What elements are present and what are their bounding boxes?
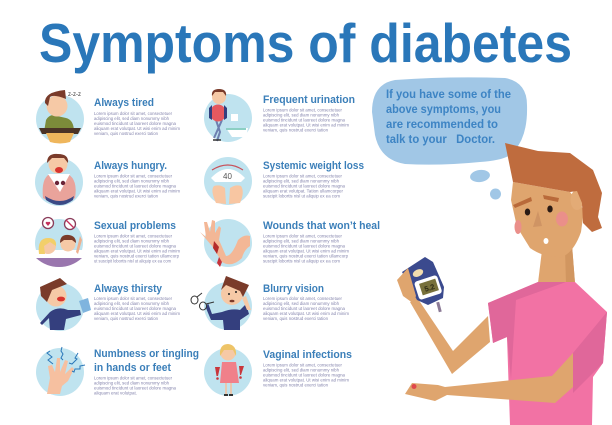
- panel: always hungry: [35, 154, 180, 206]
- heading: Vaginal infections: [263, 349, 352, 361]
- mouth: [544, 238, 548, 244]
- shirt: [488, 282, 607, 425]
- body text: aliquam erat volutpat. Ut wisi enim ad minim: [263, 378, 349, 382]
- body text: Lorem ipsum dolor sit amet, consectetuer: [263, 362, 342, 368]
- icon: man and toilet: [204, 89, 252, 142]
- body text: euismod tincidunt ut laoreet dolore magna: [94, 386, 176, 390]
- heading: Always thirsty: [94, 283, 163, 295]
- body text: [94, 234, 180, 264]
- body text: [263, 174, 345, 198]
- body text: euismod tincidunt ut laoreet dolore magna: [263, 372, 345, 378]
- body text: aliquam erat volutpat. Ut wisi enim ad minim: [94, 248, 180, 254]
- body text: veniam, quis nostrud exerci tation: [263, 316, 328, 321]
- heading: Always tired: [94, 97, 154, 109]
- panel: always tired: [36, 90, 180, 144]
- heading: Sexual problems: [94, 220, 176, 232]
- body text: adipiscing elit, sed diam nonummy nibh: [94, 238, 169, 244]
- icon: tired man: [36, 90, 84, 144]
- eyebrows: [513, 195, 559, 208]
- icon: scale: [204, 157, 252, 205]
- body text: aliquam erat volutpat. Ut wisi enim ad minim: [263, 311, 349, 316]
- body text: [263, 234, 349, 264]
- body text: Lorem ipsum dolor sit amet, consectetuer: [263, 174, 342, 178]
- body text: euismod tincidunt ut laoreet dolore magna: [94, 306, 176, 311]
- icon: hungry man: [35, 154, 83, 206]
- icon: tingling hand: [36, 347, 85, 396]
- body text: adipiscing elit, sed diam nonummy nibh: [263, 178, 339, 184]
- icon: wounded hand: [200, 219, 252, 267]
- icon: tired man: z-z-z: [68, 92, 81, 98]
- body text: adipiscing elit, sed diam nonummy nibh: [263, 368, 339, 372]
- body text: [94, 174, 180, 198]
- title: Symptoms of diabetes: [39, 12, 572, 74]
- body text: euismod tincidunt ut laoreet dolore magna: [263, 184, 345, 188]
- panel: sexual problems: [35, 218, 180, 267]
- neck: [538, 245, 575, 283]
- body text: Lorem ipsum dolor sit amet, consectetuer: [263, 108, 342, 112]
- body text: aliquam erat volutpat. Ut wisi enim ad minim: [94, 311, 180, 316]
- body text: veniam, quis nostrud exerci tation: [94, 131, 158, 136]
- heading: Frequent urination: [263, 94, 355, 106]
- body text: Lorem ipsum dolor sit amet, consectetuer: [94, 376, 172, 380]
- nose: [533, 211, 542, 227]
- raised arm: [410, 296, 490, 374]
- callout text: If you have some of the: [386, 87, 511, 101]
- body text: aliquam erat volutpat. Ut wisi enim ad minim: [263, 122, 349, 128]
- glucose meter: 5.2: [423, 282, 436, 294]
- heading: Blurry vision: [263, 283, 324, 295]
- icon: thirsty man: [36, 278, 91, 331]
- heading line 2: in hands or feet: [94, 362, 171, 374]
- body text: euismod tincidunt ut laoreet dolore magna: [263, 118, 345, 122]
- body text: suscipit lobortis nisl ut aliquip ex ea com: [263, 258, 340, 264]
- heading: Numbness or tingling: [94, 348, 199, 360]
- body text: veniam, quis nostrud exerci tation: [263, 128, 328, 132]
- heading: Always hungry.: [94, 160, 167, 172]
- body text: veniam, quis nostrud exerci tation: [263, 382, 328, 388]
- body text: [94, 296, 180, 321]
- callout: thought bubble: [372, 77, 527, 200]
- body text: veniam, quis nostrud exerci tation ullamcorp: [94, 254, 179, 258]
- lower arm: [405, 353, 573, 403]
- body text: veniam, quis nostrud exerci tation ullamcorp: [263, 254, 348, 258]
- icon: scale: 40: [223, 172, 232, 181]
- body text: [263, 296, 349, 321]
- body text: adipiscing elit, sed diam nonummy nibh: [94, 380, 169, 386]
- body text: euismod tincidunt ut laoreet dolore magna: [263, 244, 345, 248]
- body text: [94, 376, 176, 396]
- body text: aliquam erat volutpat. Ut wisi enim ad minim: [263, 248, 349, 254]
- body text: aliquam erat volutpat. Ut wisi enim ad minim: [94, 126, 180, 131]
- body text: euismod tincidunt ut laoreet dolore magna: [94, 121, 176, 126]
- panel: always thirsty: [36, 278, 180, 331]
- body text: [263, 362, 349, 388]
- callout text: above symptoms, you: [386, 102, 501, 116]
- body text: [94, 111, 180, 136]
- callout text: [386, 87, 511, 146]
- body text: suscipit lobortis nisl ut aliquip ex ea com: [263, 194, 340, 198]
- head: [511, 182, 584, 257]
- body text: adipiscing elit, sed diam nonummy nibh: [94, 116, 169, 121]
- cheeks: [556, 212, 568, 226]
- body text: adipiscing elit, sed diam nonummy nibh: [263, 238, 339, 244]
- body text: veniam, quis nostrud exerci tation: [94, 194, 158, 198]
- body text: Lorem ipsum dolor sit amet, consectetuer: [94, 234, 172, 238]
- body text: adipiscing elit, sed diam nonummy nibh: [263, 112, 339, 118]
- icon: couple: [35, 218, 83, 267]
- icon: girl: [204, 344, 252, 396]
- heading: Systemic weight loss: [263, 160, 364, 172]
- body text: ut suscipit lobortis nisl ut aliquip ex ea com: [94, 258, 171, 264]
- panel: numbness: [36, 347, 199, 396]
- body text: Lorem ipsum dolor sit amet, consectetuer: [94, 296, 172, 301]
- glucose meter: [397, 257, 444, 312]
- body text: euismod tincidunt ut laoreet dolore magna: [94, 244, 176, 248]
- icon: glasses: [191, 293, 214, 310]
- panel: frequent urination: [204, 89, 355, 142]
- eyes: [525, 208, 530, 216]
- body text: [263, 108, 349, 132]
- body text: veniam, quis nostrud exerci tation: [94, 316, 158, 321]
- hair: [505, 143, 602, 232]
- body text: adipiscing elit, sed diam nonummy nibh: [94, 301, 169, 306]
- heading: Wounds that won’t heal: [263, 220, 380, 232]
- body text: aliquam erat volutpat. Tation ullamcorper: [263, 188, 343, 194]
- body text: adipiscing elit, sed diam nonummy nibh: [94, 178, 169, 184]
- panel: vaginal infections: [204, 344, 352, 396]
- callout text: talk to your Doctor.: [386, 132, 495, 146]
- icon: man with glasses: [191, 276, 252, 330]
- panel: blurry vision: [191, 276, 349, 330]
- panel: wounds: [200, 219, 380, 267]
- panel: systemic weight loss: [204, 157, 364, 205]
- body text: euismod tincidunt ut laoreet dolore magna: [263, 306, 345, 311]
- blood drop: [412, 384, 416, 389]
- body text: aliquam erat volutpat.: [94, 390, 137, 396]
- ear: [570, 190, 584, 210]
- body text: euismod tincidunt ut laoreet dolore magna: [94, 184, 176, 188]
- body text: Lorem ipsum dolor sit amet, consectetuer: [94, 111, 172, 116]
- body text: Lorem ipsum dolor sit amet, consectetuer: [94, 174, 172, 178]
- body text: adipiscing elit, sed diam nonummy nibh: [263, 301, 339, 306]
- illustration: man with glucose meter: [397, 143, 607, 425]
- body text: Lorem ipsum dolor sit amet, consectetuer: [263, 296, 342, 301]
- body text: aliquam erat volutpat. Ut wisi enim ad minim: [94, 188, 180, 194]
- body text: Lorem ipsum dolor sit amet, consectetuer: [263, 234, 342, 238]
- callout text: are recommended to: [386, 117, 498, 131]
